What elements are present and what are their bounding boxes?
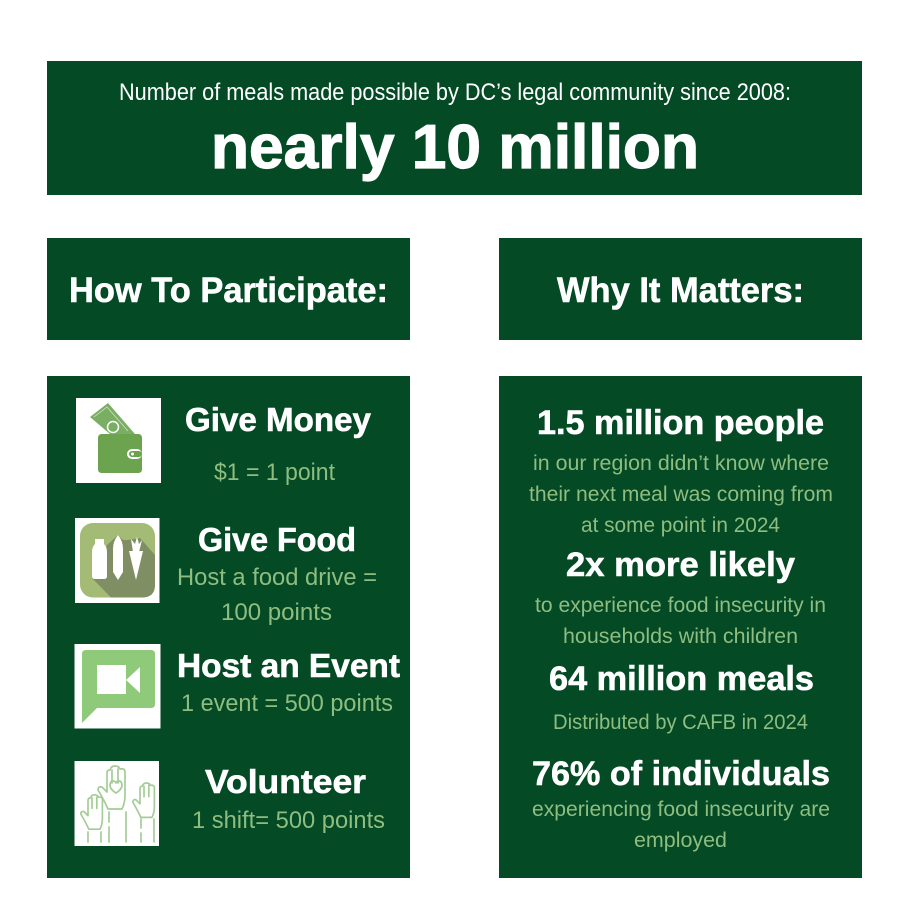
icon: raised hands xyxy=(74,761,159,846)
stat: 1.5 million people: in our region didn’t know where xyxy=(533,451,829,475)
banner: meals total xyxy=(47,61,862,195)
stat: 76% of individuals: 76% of individuals xyxy=(532,755,830,793)
item: Give Food xyxy=(177,521,377,626)
banner subtitle: Number of meals made possible by DC’s legal community since 2008: xyxy=(119,79,791,106)
item: Host an Event: Host an Event xyxy=(177,647,400,684)
banner headline: nearly 10 million xyxy=(211,113,699,182)
stat: 1.5 million people: 1.5 million people xyxy=(537,404,824,442)
icon: wallet with money xyxy=(76,398,161,483)
stat: 2x more likely: households with children xyxy=(563,624,798,648)
heading: How To Participate: How To Participate: xyxy=(69,271,388,310)
icon: food xyxy=(75,518,160,603)
item: Give Food: Host a food drive = xyxy=(177,564,377,591)
item: Host an Event xyxy=(177,647,400,717)
heading: Why It Matters xyxy=(499,238,862,340)
item: Give Food: Give Food xyxy=(198,521,356,558)
item: Volunteer: 1 shift= 500 points xyxy=(192,807,385,834)
stat: 2x more likely: 2x more likely xyxy=(566,546,795,584)
stat: 64 million meals xyxy=(549,660,814,734)
item: Give Money: Give Money xyxy=(185,401,372,438)
item: Host an Event: 1 event = 500 points xyxy=(181,690,393,717)
stat: 76% of individuals xyxy=(532,755,830,852)
stat: 64 million meals: Distributed by CAFB in 2024 xyxy=(553,710,808,734)
panel: how to participate xyxy=(47,376,410,878)
icon: video chat xyxy=(74,644,160,728)
stat: 1.5 million people: their next meal was coming from xyxy=(529,482,833,506)
heading: Why It Matters: Why It Matters: xyxy=(557,271,804,310)
heading: How To Participate xyxy=(47,238,410,340)
stat: 1.5 million people xyxy=(529,404,833,537)
stat: 1.5 million people: at some point in 2024 xyxy=(581,513,780,537)
stat: 76% of individuals: employed xyxy=(634,828,727,852)
stat: 2x more likely: to experience food insecurity in xyxy=(535,593,826,617)
panel: why it matters xyxy=(499,376,862,878)
item: Give Money: $1 = 1 point xyxy=(214,459,335,486)
stat: 2x more likely xyxy=(535,546,826,648)
item: Give Food: 100 points xyxy=(221,599,332,626)
item: Volunteer: Volunteer xyxy=(205,763,366,800)
stat: 64 million meals: 64 million meals xyxy=(549,660,814,698)
item: Give Money xyxy=(185,401,372,486)
stat: 76% of individuals: experiencing food insecurity are xyxy=(532,797,830,821)
item: Volunteer xyxy=(192,763,385,834)
